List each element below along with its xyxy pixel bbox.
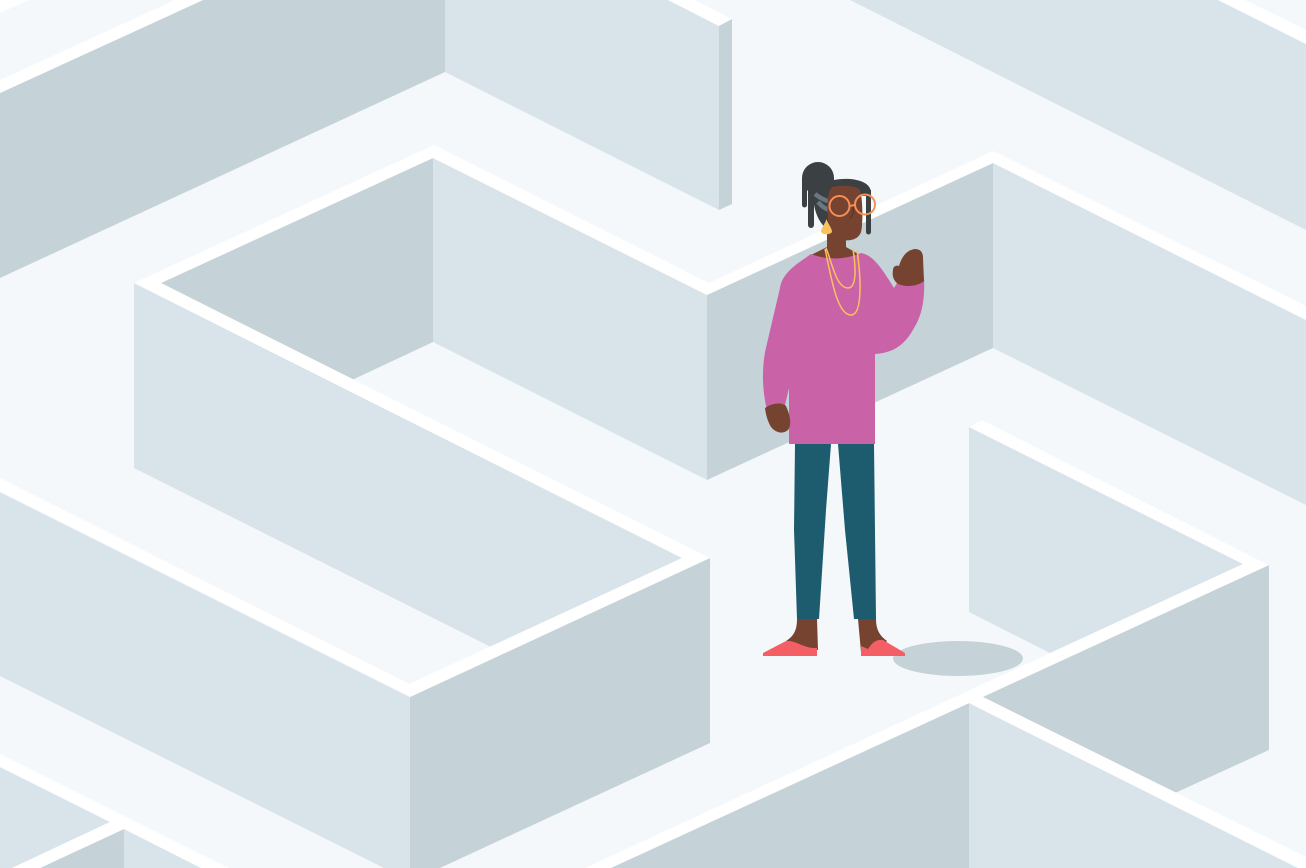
shadow on floor	[893, 641, 1023, 676]
wall: top right block	[850, 0, 1306, 230]
glasses	[830, 194, 875, 216]
necklaces	[825, 248, 860, 315]
hair back and bun	[802, 162, 871, 234]
wall: lower left block	[0, 478, 710, 868]
neck and collar	[811, 225, 860, 260]
face	[827, 186, 862, 240]
near earring	[821, 219, 832, 234]
sweater	[763, 253, 924, 444]
raised hand	[893, 249, 924, 286]
lower hand	[765, 404, 790, 433]
wall: long diagonal wall	[134, 283, 710, 647]
wall: central zigzag block	[134, 145, 1306, 505]
wall: top left block	[0, 0, 732, 278]
ankles	[786, 619, 887, 652]
shoes	[763, 640, 905, 656]
wall: bottom right block	[585, 564, 1306, 868]
person	[763, 162, 924, 656]
pants	[794, 444, 876, 619]
wall: right block	[969, 420, 1269, 793]
nose line	[850, 206, 853, 218]
grey hair streak	[815, 194, 832, 211]
wall: bottom left corner	[0, 754, 229, 868]
far earring	[858, 228, 862, 234]
